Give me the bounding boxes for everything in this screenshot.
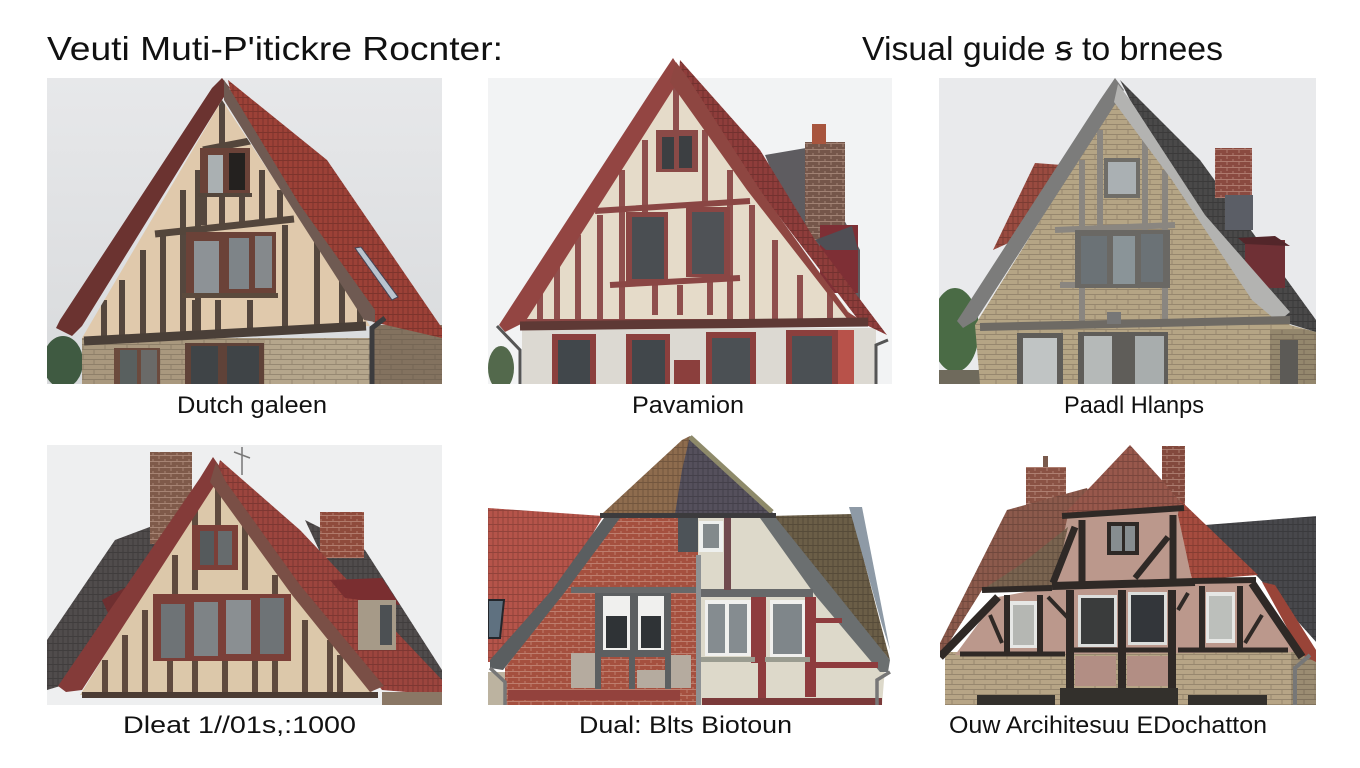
- right dormer window: [1206, 592, 1235, 643]
- tree: [939, 288, 978, 370]
- top window: [656, 130, 698, 172]
- floor beam: [82, 692, 378, 698]
- hipped roof dark half: [675, 436, 773, 514]
- downpipes: [490, 668, 890, 705]
- downpipe: [372, 318, 385, 384]
- label: house 5: Dual: Blts Biotoun: [579, 712, 792, 739]
- panel: house 5 photo: [488, 436, 890, 705]
- red roof: [215, 460, 442, 695]
- left double window: [595, 593, 671, 657]
- rear dormer: [815, 225, 858, 293]
- pink panels: [1075, 656, 1168, 686]
- dark timbers: [940, 508, 1302, 690]
- right bargeboard: [210, 462, 384, 692]
- left bargeboard: [56, 78, 230, 336]
- brick wall: [505, 518, 698, 705]
- sky: [939, 78, 1316, 384]
- stone ground floor: [82, 325, 442, 384]
- left slate roof: [47, 525, 170, 690]
- side dormer: [330, 578, 400, 650]
- slate rear roof: [765, 148, 860, 300]
- slate roof right: [1120, 80, 1316, 332]
- title: left heading: Veuti Muti-P'itickre Rocnter:: [47, 30, 503, 67]
- render patches under window: [571, 653, 691, 688]
- posts under window: [598, 657, 668, 689]
- label: house 4: Dleat 1//01s,:1000: [123, 712, 356, 739]
- middle window: [182, 232, 278, 298]
- top window: [1107, 522, 1139, 555]
- left main roof: [940, 488, 1100, 657]
- ground floor windows: [1017, 332, 1298, 384]
- eave: [600, 513, 776, 518]
- right dormer: [1238, 236, 1290, 288]
- right slate roof: [305, 520, 442, 695]
- upper window: [192, 525, 238, 570]
- right bargeboard: [1114, 84, 1290, 322]
- mid floor beam: [980, 320, 1290, 327]
- left dormer window: [1010, 601, 1037, 648]
- pink infill wall: [955, 510, 1298, 655]
- upper dark shutter and window: [678, 518, 731, 590]
- right red roof section: [1178, 500, 1258, 580]
- left dormer roof: [993, 163, 1062, 250]
- sky: [47, 445, 442, 705]
- right windows: [705, 600, 805, 657]
- right bargeboard: [224, 80, 375, 322]
- left bargeboard: [490, 518, 620, 670]
- main window: [153, 594, 291, 661]
- chimney: [1215, 148, 1253, 230]
- ground floor render: [522, 328, 876, 384]
- tree: [488, 346, 514, 384]
- grey timber frames: [1055, 120, 1175, 325]
- small dark red dormer: [102, 585, 132, 622]
- lower left wall box: [488, 672, 506, 705]
- left chimney: [1026, 456, 1066, 519]
- panel: house 1 photo: [43, 78, 442, 388]
- ridge tiles: [690, 437, 772, 512]
- floor beam: [520, 322, 868, 326]
- left bargeboard: [957, 78, 1124, 328]
- upper window: [198, 148, 252, 197]
- gable wall with timbers: [520, 85, 860, 326]
- panel: house 2 photo: [488, 58, 892, 390]
- gable wall with timbers: [82, 100, 370, 341]
- downpipes: [497, 326, 888, 384]
- ground floor beams: [977, 688, 1267, 705]
- grey flashing: [849, 507, 890, 650]
- hipped roof brown half: [603, 436, 690, 514]
- left bargeboard: [58, 457, 222, 692]
- mossy dormer roof: [982, 527, 1068, 590]
- middle window: [1075, 230, 1170, 288]
- stone wall and gable: [975, 100, 1316, 384]
- panel: house 4 photo: [47, 445, 442, 705]
- gable wall with timbers: [80, 480, 375, 700]
- lower eave: [382, 692, 442, 705]
- skylight: [488, 600, 504, 638]
- title: right heading: Visual guide ꞩ to brnees: [862, 30, 1223, 67]
- label: house 3: Paadl Hlanps: [1064, 392, 1204, 419]
- right chimney: [1162, 446, 1185, 506]
- downpipe: [1295, 655, 1310, 705]
- sky: [47, 78, 442, 384]
- antenna: [234, 447, 250, 475]
- slate roof right: [1205, 516, 1317, 643]
- mossy right roof: [770, 514, 890, 660]
- left bargeboard: [499, 58, 682, 332]
- panel: house 6 photo: [940, 445, 1317, 705]
- red left roof: [488, 508, 603, 662]
- render wall: [698, 518, 885, 705]
- wall lower stone: [945, 652, 1316, 705]
- top window: [1104, 158, 1140, 198]
- label: house 6: Ouw Arcihitesuu EDochatton: [949, 712, 1267, 739]
- label: house 2: Pavamion: [632, 392, 744, 419]
- sills: [701, 657, 810, 662]
- right bargeboard: [674, 62, 857, 318]
- red beam: [508, 690, 680, 700]
- tree: [47, 336, 82, 384]
- right timber frame: [702, 597, 882, 705]
- right chimney: [320, 512, 364, 558]
- sky: [488, 78, 892, 384]
- panel: house 3 photo: [931, 78, 1316, 384]
- middle windows: [626, 207, 730, 282]
- skylight: [355, 247, 398, 300]
- central grey post and beams: [571, 555, 813, 705]
- lower right eave tiles: [1262, 582, 1316, 662]
- ground floor windows: [552, 330, 854, 384]
- lamp: [1107, 312, 1121, 324]
- top dormer roof: [1063, 445, 1183, 515]
- fence: [939, 370, 981, 384]
- label: house 1: Dutch galeen: [177, 392, 327, 419]
- middle windows: [1078, 592, 1167, 647]
- right bargeboard: [760, 518, 890, 672]
- ground floor windows: [114, 343, 264, 384]
- red tiled roof: [228, 80, 442, 338]
- left chimney: [150, 452, 192, 544]
- red roof: [678, 60, 887, 335]
- chimney: [805, 124, 845, 242]
